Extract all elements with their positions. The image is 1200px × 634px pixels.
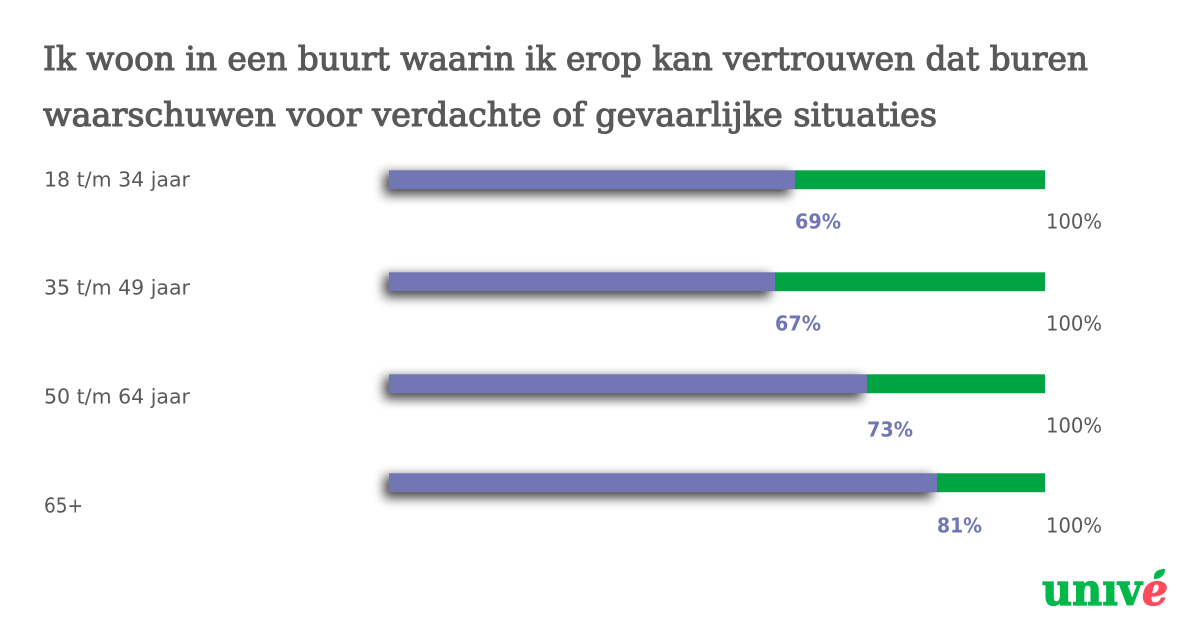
row: 35 t/m 49 jaar xyxy=(44,272,1102,336)
value: 81%: 81% xyxy=(937,514,982,538)
row: 18 t/m 34 jaar xyxy=(44,168,1102,234)
bar: 73% xyxy=(389,374,867,393)
value: 100%: 100% xyxy=(1046,312,1102,336)
bar: remainder to 100% xyxy=(867,374,1045,393)
bar: remainder to 100% xyxy=(795,170,1045,189)
bar shadow xyxy=(384,275,770,297)
title: waarschuwen voor verdachte of gevaarlijke situaties xyxy=(43,95,937,134)
age label: 65+: 65+ xyxy=(44,494,83,518)
age label: 50 t/m 64 jaar: 50 t/m 64 jaar xyxy=(44,384,191,408)
bar shadow xyxy=(384,173,790,195)
title: Ik woon in een buurt waarin ik erop kan vertrouwen dat buren xyxy=(43,39,1088,78)
bar: 81% xyxy=(389,473,937,492)
value: 67%: 67% xyxy=(775,312,821,336)
bar shadow xyxy=(384,476,932,498)
icon: leaf accent xyxy=(1154,569,1165,579)
bar: 69% xyxy=(389,170,795,189)
row: 65+ xyxy=(44,473,1102,538)
value: 100%: 100% xyxy=(1046,514,1102,538)
logo: univé: unıv xyxy=(1042,565,1143,616)
age label: 35 t/m 49 jaar: 35 t/m 49 jaar xyxy=(44,276,191,300)
age label: 18 t/m 34 jaar: 18 t/m 34 jaar xyxy=(44,168,191,192)
value: 100%: 100% xyxy=(1046,210,1102,234)
bar: remainder to 100% xyxy=(775,272,1045,291)
logo: univé: e xyxy=(1142,565,1168,616)
bar: 67% xyxy=(389,272,775,291)
value: 73%: 73% xyxy=(867,418,913,442)
row: 50 t/m 64 jaar xyxy=(44,374,1102,442)
bar: remainder to 100% xyxy=(937,473,1045,492)
bar shadow xyxy=(384,377,862,399)
value: 69%: 69% xyxy=(795,210,841,234)
value: 100%: 100% xyxy=(1046,414,1102,438)
title xyxy=(43,39,1088,134)
